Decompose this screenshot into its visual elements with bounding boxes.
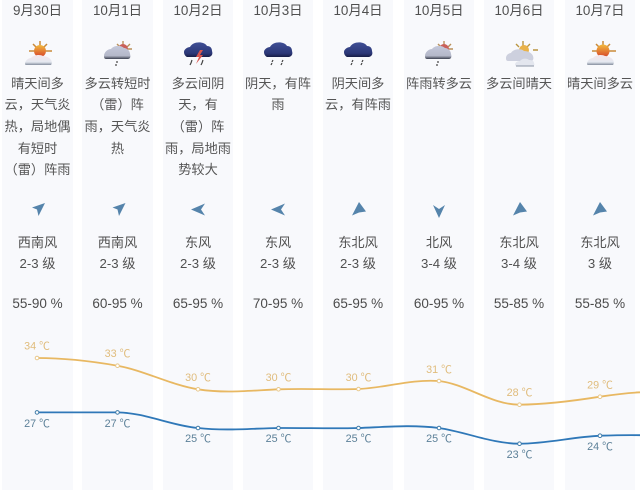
icon: sun with rain cloud, 10月5日 [425, 41, 453, 66]
high temperature labels: 34 ℃ [24, 340, 50, 352]
high temperature labels [24, 340, 613, 399]
icon: wind arrow 10月4日 [352, 202, 366, 216]
weather description: 雨，局地雨 [165, 141, 231, 156]
humidity: 55-85 % [494, 296, 544, 310]
humidity: 70-95 % [253, 296, 303, 310]
icon: sun with rain cloud, 10月1日 [104, 41, 132, 66]
humidity: 55-85 % [575, 296, 625, 310]
high temperature labels: 30 ℃ [346, 372, 372, 384]
panel: 10月6日 [484, 0, 554, 490]
weather description: 热 [111, 141, 124, 156]
panel: 10月7日 [565, 0, 635, 490]
wind direction and force: 东风 [265, 235, 291, 250]
wind direction and force [98, 235, 137, 271]
panel: 10月5日 [404, 0, 474, 490]
wind direction and force: 西南风 [18, 235, 57, 250]
humidity: 55-90 % [12, 296, 63, 310]
high temperature labels: 28 ℃ [507, 387, 533, 399]
panel: 10月2日 [163, 0, 233, 490]
low temperature labels: 25 ℃ [185, 433, 211, 445]
icon: sun with light cloud, 9月30日 [25, 41, 52, 65]
weather description: 晴天间多云 [567, 76, 633, 90]
low temperature labels: 25 ℃ [346, 433, 372, 445]
wind direction and force: 2-3 级 [180, 256, 216, 271]
wind direction and force: 北风 [426, 235, 452, 250]
date: 9月30日 [13, 3, 62, 18]
wind direction and force: 3 级 [588, 256, 612, 271]
weather description: 云，有阵雨 [325, 97, 391, 112]
weather description: （雷）阵 [172, 119, 224, 134]
chart: high temperature line [35, 356, 640, 407]
wind direction and force: 2-3 级 [260, 256, 296, 271]
weather description: 阴天间多 [332, 76, 384, 90]
chart: low temperature line [35, 411, 640, 446]
low temperature labels: 24 ℃ [587, 441, 613, 453]
wind direction and force [180, 235, 216, 271]
panel: 10月3日 [243, 0, 313, 490]
wind direction and force: 东北风 [580, 235, 620, 250]
low temperature labels: 27 ℃ [24, 418, 50, 430]
high temperature labels: 31 ℃ [426, 364, 452, 376]
date: 10月2日 [173, 3, 223, 18]
weather description [165, 76, 231, 177]
low temperature labels: 25 ℃ [426, 433, 452, 445]
icon: wind arrow 10月1日 [112, 203, 126, 216]
wind direction and force: 3-4 级 [501, 256, 537, 271]
humidity: 65-95 % [333, 296, 383, 310]
weather description [325, 76, 391, 112]
wind direction and force [580, 235, 620, 271]
icon: sun with two clouds, 10月6日 [506, 41, 538, 66]
wind direction and force [421, 235, 457, 271]
weather description: 晴天间多 [11, 76, 64, 90]
weather description [245, 76, 311, 112]
wind direction and force: 东北风 [338, 235, 378, 250]
date: 10月1日 [93, 3, 142, 18]
weather description: 阴天，有阵 [245, 76, 311, 90]
wind direction and force: 2-3 级 [340, 256, 376, 271]
high temperature labels: 30 ℃ [266, 372, 292, 384]
high temperature labels: 33 ℃ [105, 348, 131, 360]
wind direction and force [499, 235, 539, 271]
weather description: 天，有 [178, 97, 218, 112]
weather description: 多云间阴 [172, 76, 224, 90]
icon: thunderstorm cloud, 10月2日 [184, 42, 212, 65]
weather description: 阵雨转多云 [406, 76, 472, 90]
icon: wind arrow 10月2日 [191, 204, 205, 216]
low temperature labels [24, 418, 613, 461]
humidity: 60-95 % [414, 296, 464, 310]
weather description: 热，局地偶 [5, 119, 70, 134]
weather description: 多云间晴天 [486, 76, 552, 90]
weather description: 雨，天气炎 [85, 119, 150, 134]
wind direction and force: 3-4 级 [421, 256, 457, 271]
wind direction and force [18, 235, 57, 271]
wind direction and force: 东北风 [499, 235, 539, 250]
wind direction and force: 2-3 级 [100, 256, 135, 271]
high temperature labels: 29 ℃ [587, 380, 613, 392]
humidity: 60-95 % [92, 296, 143, 310]
low temperature labels: 23 ℃ [507, 449, 533, 461]
weather description: 雨 [271, 97, 285, 112]
panel: 10月1日 [82, 0, 153, 490]
icon: rain cloud, 10月4日 [344, 42, 372, 65]
weather description: 云，天气炎 [5, 97, 70, 112]
icon: wind arrow 9月30日 [32, 203, 45, 216]
weather description: （雷）阵 [91, 97, 144, 112]
date: 10月5日 [414, 3, 464, 18]
date: 10月6日 [494, 3, 544, 18]
weather description: 势较大 [178, 162, 218, 177]
icon: wind arrow 10月3日 [271, 204, 285, 216]
high temperature labels: 30 ℃ [185, 372, 211, 384]
weather description [5, 76, 70, 177]
weather description: （雷）阵雨 [5, 162, 70, 177]
icon: wind arrow 10月7日 [593, 202, 607, 216]
wind direction and force: 西南风 [98, 235, 137, 250]
icon: wind arrow 10月6日 [513, 202, 527, 216]
date: 10月4日 [333, 3, 383, 18]
humidity: 65-95 % [173, 296, 223, 310]
panel: 10月4日 [323, 0, 393, 490]
icon: wind arrow 10月5日 [433, 205, 445, 218]
weather description: 多云转短时 [85, 76, 150, 90]
date: 10月7日 [575, 3, 625, 18]
weather description: 有短时 [18, 141, 57, 156]
weather description [85, 76, 150, 156]
wind direction and force: 东风 [185, 235, 211, 250]
wind direction and force [260, 235, 296, 271]
date: 10月3日 [253, 3, 303, 18]
low temperature labels: 27 ℃ [105, 418, 131, 430]
icon: sun with light cloud, 10月7日 [587, 41, 616, 65]
wind direction and force: 2-3 级 [20, 256, 55, 271]
icon: rain cloud, 10月3日 [264, 42, 292, 65]
panel: 9月30日 [2, 0, 73, 490]
wind direction and force [338, 235, 378, 271]
low temperature labels: 25 ℃ [266, 433, 292, 445]
